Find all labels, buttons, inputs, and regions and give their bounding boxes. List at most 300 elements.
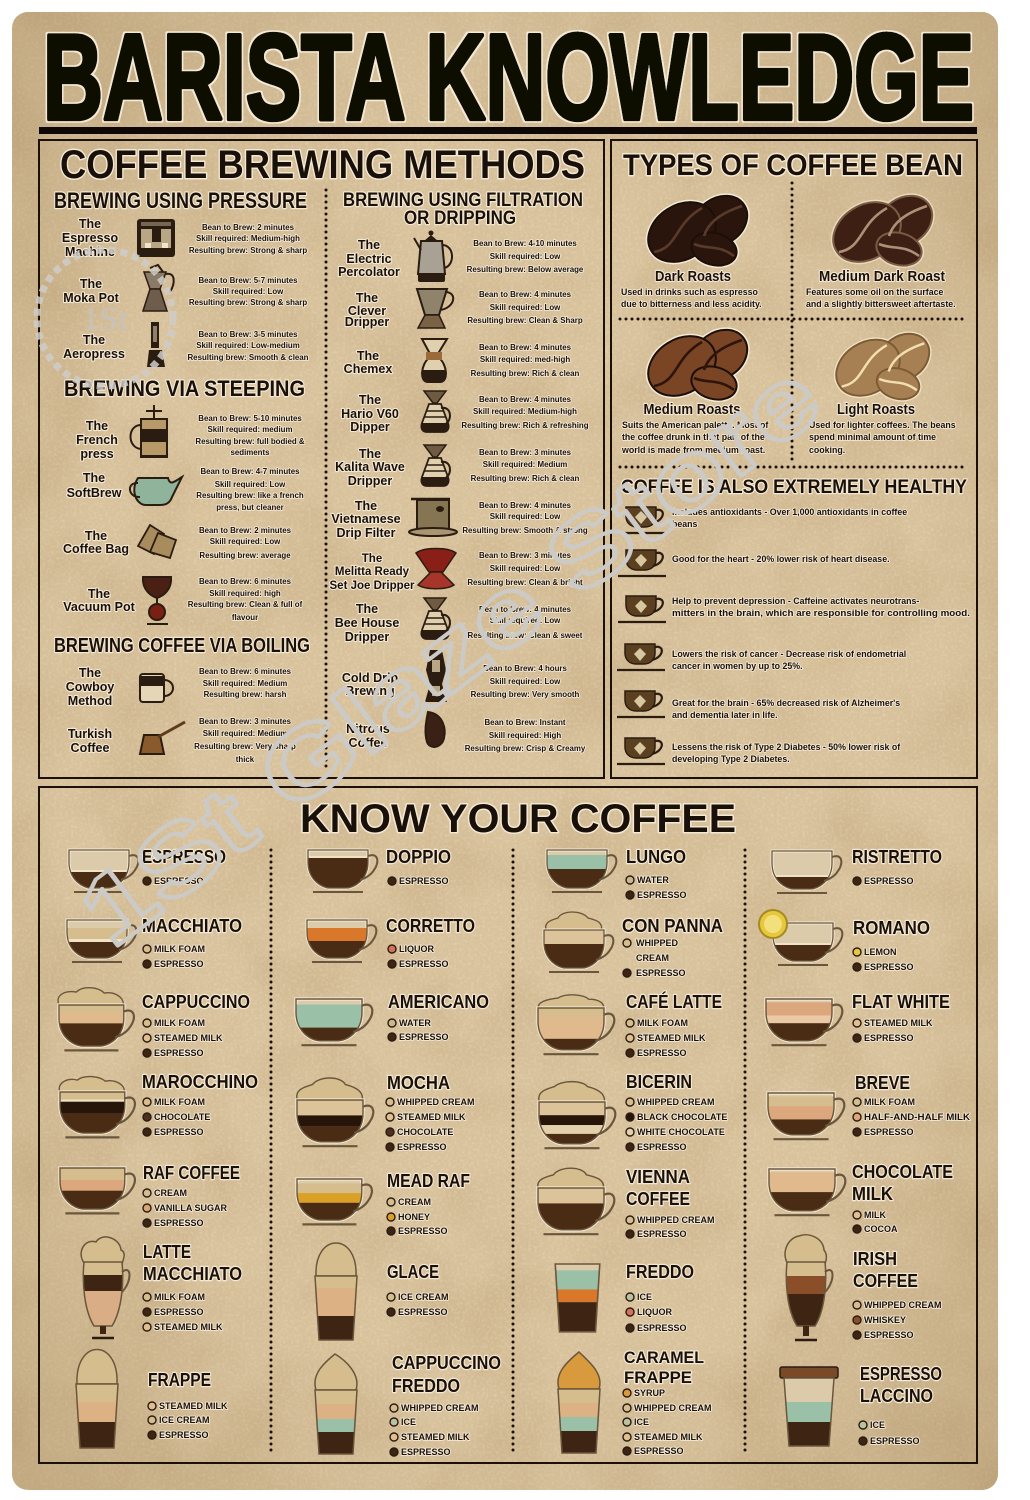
- icon: mead raf cup: [297, 1179, 372, 1224]
- drink: ristretto: [772, 846, 942, 893]
- icon: ristretto cup: [772, 851, 841, 893]
- legend: LEMON: [864, 947, 896, 957]
- method: hario v60 dripper: Hario V60: [341, 407, 399, 421]
- health: brain: Great for the brain - 65% decreased risk of Alzheimer's: [672, 698, 900, 708]
- method: espresso machine: Bean to Brew: 2 minutes: [202, 223, 295, 232]
- legend: STEAMED MILK: [634, 1432, 703, 1442]
- drink: americano: [296, 991, 489, 1045]
- legend: WHIPPED CREAM: [397, 1097, 475, 1107]
- drink: latte macchiato: [78, 1237, 242, 1338]
- icon: lungo cup: [547, 850, 616, 892]
- icon: irish coffee glass: [781, 1235, 832, 1340]
- legend: WATER: [637, 875, 669, 885]
- drink: bicerin: [539, 1071, 727, 1152]
- legend: LIQUOR: [637, 1307, 672, 1317]
- method: chemex: Skill required: med-high: [480, 355, 570, 364]
- icon: cappuccino freddo glass: [314, 1353, 358, 1455]
- method: moka pot: Skill required: Low: [213, 287, 284, 296]
- drink: mead raf: MEAD RAF: [387, 1170, 470, 1191]
- health: cancer: cancer in women by up to 25%.: [672, 661, 803, 671]
- legend: WHIPPED CREAM: [864, 1300, 942, 1310]
- drink: glace: GLACE: [387, 1261, 439, 1282]
- legend: ESPRESSO: [634, 1446, 684, 1456]
- health: depression: Help to prevent depression - Caffeine activates neurotrans-: [672, 596, 919, 606]
- method: electric percolator: Percolator: [338, 265, 400, 279]
- health: depression: mitters in the brain, which are responsible for controlling mood.: [672, 608, 970, 618]
- legend: MILK: [864, 1210, 886, 1220]
- legend: [387, 1197, 448, 1236]
- heading: brewing coffee via boiling: BREWING COFFEE VIA BOILING: [54, 635, 310, 657]
- method: coffee bag: Skill required: Low: [210, 537, 281, 546]
- drink: flat white: [766, 991, 950, 1045]
- bean: light roasts: Used for lighter coffees. The beans: [809, 420, 956, 430]
- heading: types of coffee bean: TYPES OF COFFEE BEAN: [623, 149, 963, 182]
- method: cold drip brewing: Skill required: Low: [490, 677, 561, 686]
- drink: cappuccino: [58, 988, 250, 1058]
- method: moka pot: The: [80, 277, 102, 291]
- drink: raf coffee: RAF COFFEE: [143, 1162, 240, 1183]
- legend: [387, 1292, 449, 1317]
- drink: marocchino: MAROCCHINO: [142, 1071, 258, 1092]
- method: cowboy method: Resulting brew: harsh: [204, 690, 287, 699]
- health: depression: [618, 596, 970, 622]
- legend: [853, 947, 914, 972]
- drink: raf coffee: [60, 1162, 240, 1228]
- drink: lungo: [547, 846, 687, 900]
- method: moka pot: Moka Pot: [63, 291, 120, 305]
- method: melitta ready set joe dripper: [330, 548, 583, 592]
- health: cancer: Lowers the risk of cancer - Decrease risk of endometrial: [672, 649, 906, 659]
- method: turkish coffee: [68, 717, 296, 764]
- legend: ESPRESSO: [398, 1226, 448, 1236]
- legend: ESPRESSO: [154, 876, 204, 886]
- drink: vienna coffee: COFFEE: [626, 1188, 690, 1209]
- method: bee house dripper: Resulting brew: Clean & sweet: [468, 631, 583, 640]
- legend: CHOCOLATE: [154, 1112, 210, 1122]
- legend: WHIPPED CREAM: [401, 1403, 479, 1413]
- method: electric percolator: Skill required: Low: [490, 252, 561, 261]
- legend: STEAMED MILK: [637, 1033, 706, 1043]
- method: chemex: Chemex: [344, 362, 392, 376]
- drink: mocha: [297, 1072, 475, 1152]
- heading: brewing via steeping: BREWING VIA STEEPING: [64, 376, 305, 401]
- legend: [143, 944, 205, 969]
- drink: breve: BREVE: [855, 1072, 910, 1093]
- icon: freddo glass: [551, 1264, 604, 1332]
- legend: ESPRESSO: [399, 959, 449, 969]
- icon: raf coffee cup: [60, 1168, 135, 1213]
- bean: medium dark roast: and a slightly bittersweet aftertaste.: [806, 299, 956, 309]
- method: electric percolator: Electric: [346, 252, 392, 266]
- legend: MILK FOAM: [154, 1097, 205, 1107]
- method: cowboy method: Method: [68, 694, 112, 708]
- method: espresso machine: The: [79, 217, 101, 231]
- drink: cafe latte: CAFÉ LATTE: [626, 991, 722, 1012]
- method: hario v60 dripper: Bean to Brew: 4 minutes: [479, 395, 572, 404]
- drink: marocchino: [59, 1071, 258, 1137]
- icon: breve cup: [768, 1093, 844, 1139]
- legend: VANILLA SUGAR: [154, 1203, 227, 1213]
- legend: SYRUP: [634, 1388, 665, 1398]
- drink: doppio: DOPPIO: [386, 846, 451, 867]
- legend: ESPRESSO: [159, 1430, 209, 1440]
- legend: ESPRESSO: [154, 1307, 204, 1317]
- heading: brewing using filtration or dripping: BREWING USING FILTRATION: [343, 190, 583, 211]
- icon: con panna cup: [544, 912, 613, 972]
- method: chemex: The: [357, 349, 379, 363]
- drink: cappuccino freddo: CAPPUCCINO: [392, 1352, 501, 1373]
- heading: brewing using filtration or dripping: OR DRIPPING: [404, 208, 516, 229]
- method: hario v60 dripper: Dipper: [350, 420, 390, 434]
- legend: [859, 1420, 920, 1446]
- icon: cafe latte cup: [538, 995, 614, 1054]
- drink: vienna coffee: [538, 1166, 715, 1239]
- legend: LIQUOR: [399, 944, 434, 954]
- icon: french press: [130, 405, 168, 458]
- legend: ICE: [401, 1417, 416, 1427]
- method: french press: Resulting brew: full bodied &: [195, 437, 305, 446]
- method: cowboy method: Bean to Brew: 6 minutes: [199, 667, 292, 676]
- legend: ESPRESSO: [864, 876, 914, 886]
- method: hario v60 dripper: Resulting brew: Rich & refreshing: [461, 421, 589, 430]
- method: softbrew: [67, 467, 304, 512]
- icon: coffee bags: [138, 525, 176, 558]
- drink: con panna: [544, 912, 723, 978]
- drink: corretto: [307, 915, 475, 969]
- legend: ESPRESSO: [154, 1127, 204, 1137]
- method: softbrew: Bean to Brew: 4-7 minutes: [200, 467, 300, 476]
- method: coffee bag: [63, 525, 292, 560]
- method: turkish coffee: Coffee: [71, 741, 109, 755]
- method: coffee bag: Bean to Brew: 2 minutes: [199, 526, 292, 535]
- panel: types of coffee bean: [611, 140, 977, 778]
- icon: caramel frappe glass: [554, 1352, 604, 1453]
- drink: bicerin: BICERIN: [626, 1071, 692, 1092]
- bean: dark roasts: [621, 186, 762, 309]
- legend: [143, 1188, 227, 1228]
- legend: [143, 1018, 223, 1058]
- legend: [623, 1388, 712, 1456]
- method: clever dripper: Dripper: [345, 315, 389, 329]
- icon: bee house dripper: [421, 598, 450, 639]
- icon: clever dripper: [417, 289, 453, 328]
- legend: ESPRESSO: [398, 1307, 448, 1317]
- method: vacuum pot: flavour: [232, 613, 258, 622]
- method: softbrew: Resulting brew: like a french: [196, 491, 304, 500]
- method: kalita wave dripper: Kalita Wave: [335, 460, 405, 474]
- legend: ESPRESSO: [637, 1229, 687, 1239]
- method: kalita wave dripper: Skill required: Medium: [483, 460, 567, 469]
- icon: cezve: [140, 722, 185, 754]
- legend: MILK FOAM: [154, 1018, 205, 1028]
- legend: MILK FOAM: [637, 1018, 688, 1028]
- method: espresso machine: Espresso: [62, 231, 119, 245]
- legend: MILK FOAM: [154, 944, 205, 954]
- icon: aeropress: [147, 322, 165, 367]
- heading: coffee brewing methods: COFFEE BREWING METHODS: [60, 143, 585, 187]
- method: moka pot: Bean to Brew: 5-7 minutes: [198, 276, 298, 285]
- legend: ESPRESSO: [636, 968, 686, 978]
- icon: mocha cup: [297, 1078, 373, 1146]
- method: aeropress: [63, 322, 309, 367]
- method: espresso machine: Skill required: Medium-high: [196, 234, 300, 243]
- legend: STEAMED MILK: [154, 1322, 223, 1332]
- health: heart: Good for the heart - 20% lower risk of heart disease.: [672, 554, 890, 564]
- icon: cup: [618, 596, 666, 622]
- legend: ESPRESSO: [637, 1142, 687, 1152]
- method: chemex: Bean to Brew: 4 minutes: [479, 343, 572, 352]
- legend: [626, 1292, 687, 1333]
- drink: mead raf: [297, 1170, 470, 1236]
- drink: caramel frappe: CARAMEL: [624, 1348, 704, 1367]
- method: cold drip brewing: [342, 650, 580, 702]
- drink: espresso: [69, 846, 226, 892]
- legend: ICE CREAM: [398, 1292, 449, 1302]
- method: cold drip brewing: Bean to Brew: 4 hours: [483, 664, 567, 673]
- legend: ESPRESSO: [637, 890, 687, 900]
- method: espresso machine: [62, 217, 307, 259]
- health: antioxidants: beans: [672, 519, 698, 529]
- drink: frappe: [72, 1350, 228, 1448]
- method: clever dripper: Resulting brew: Clean & Sharp: [467, 316, 583, 325]
- health: brain: [617, 691, 900, 720]
- drink: chocolate milk: CHOCOLATE: [852, 1161, 953, 1182]
- legend: ESPRESSO: [864, 1033, 914, 1043]
- legend: BLACK CHOCOLATE: [637, 1112, 727, 1122]
- legend: ESPRESSO: [637, 1323, 687, 1333]
- method: electric percolator: [338, 230, 584, 282]
- heading: coffee is also extremely healthy: COFFEE IS ALSO EXTREMELY HEALTHY: [621, 477, 967, 498]
- method: cowboy method: Cowboy: [66, 680, 114, 694]
- method: turkish coffee: Turkish: [68, 727, 112, 741]
- bean: medium roasts: Medium Roasts: [644, 402, 740, 418]
- method: vacuum pot: Vacuum Pot: [63, 600, 136, 614]
- drink: cappuccino freddo: [311, 1352, 501, 1457]
- bean: dark roasts: Used in drinks such as espresso: [621, 287, 759, 297]
- drink: espresso laccino: LACCINO: [860, 1385, 933, 1406]
- method: vietnamese drip filter: Bean to Brew: 4 minutes: [479, 501, 572, 510]
- method: nitrous coffee: Nitrous: [346, 722, 390, 736]
- icon: chemex: [422, 339, 447, 382]
- icon: americano cup: [296, 999, 372, 1045]
- drink: latte macchiato: MACCHIATO: [143, 1263, 242, 1284]
- method: vietnamese drip filter: [331, 499, 588, 540]
- method: electric percolator: The: [358, 238, 380, 252]
- drink: chocolate milk: MILK: [852, 1183, 894, 1204]
- legend: ICE: [634, 1417, 649, 1427]
- legend: WATER: [399, 1018, 431, 1028]
- drink: corretto: CORRETTO: [386, 915, 475, 936]
- legend: ESPRESSO: [399, 876, 449, 886]
- method: turkish coffee: thick: [236, 755, 255, 764]
- method: nitrous coffee: Bean to Brew: Instant: [484, 718, 566, 727]
- bean: dark roasts: Dark Roasts: [655, 269, 731, 285]
- drink: cafe latte: [538, 991, 722, 1058]
- icon: vienna coffee cup: [538, 1168, 614, 1234]
- method: chemex: [344, 339, 580, 382]
- icon: cowboy mug: [140, 674, 173, 702]
- bean: medium roasts: the coffee drunk in that part of the: [622, 432, 765, 442]
- method: clever dripper: Clever: [348, 304, 386, 318]
- drink: frappe: FRAPPE: [148, 1369, 211, 1390]
- drink: irish coffee: COFFEE: [853, 1270, 918, 1291]
- method: bee house dripper: Bee House: [335, 616, 399, 630]
- legend: [626, 1018, 706, 1058]
- drink: macchiato: MACCHIATO: [142, 915, 242, 936]
- legend: WHIPPED CREAM: [637, 1097, 715, 1107]
- method: espresso machine: Machine: [65, 245, 115, 259]
- icon: latte macchiato glass: [78, 1237, 130, 1338]
- legend: [853, 1018, 933, 1043]
- method: softbrew: The: [83, 471, 105, 485]
- health: diabetes: [617, 738, 900, 764]
- legend: WHIPPED: [636, 938, 679, 948]
- method: french press: [76, 405, 305, 461]
- panel: know your coffee: [39, 787, 977, 1463]
- method: electric percolator: Bean to Brew: 4-10 minutes: [473, 239, 577, 248]
- method: clever dripper: [345, 289, 583, 329]
- icon: cup: [618, 550, 666, 576]
- icon: kalita wave: [421, 445, 450, 486]
- method: electric percolator: Resulting brew: Below average: [467, 265, 584, 274]
- method: bee house dripper: Skill required: Low: [490, 616, 561, 625]
- bean: dark roasts: due to bitterness and less acidity.: [621, 299, 762, 309]
- drink: con panna: CON PANNA: [622, 915, 723, 936]
- method: bee house dripper: Dripper: [345, 630, 389, 644]
- method: aeropress: The: [83, 333, 105, 347]
- icon: marocchino cup: [59, 1077, 135, 1137]
- method: nitrous coffee: Coffee: [349, 736, 387, 750]
- bean: light roasts: spend minimal amount of time: [809, 432, 936, 442]
- icon: romano cup with lemon: [759, 910, 842, 965]
- method: melitta ready set joe dripper: Resulting brew: Clean & bright: [467, 578, 583, 587]
- bean: medium dark roast: Medium Dark Roast: [819, 269, 945, 285]
- watermark: diagonal store name: 1St Glaze Store: [60, 343, 839, 967]
- method: french press: sediments: [230, 448, 270, 457]
- icon: cup: [618, 507, 666, 533]
- legend: MILK FOAM: [864, 1097, 915, 1107]
- method: clever dripper: The: [356, 291, 378, 305]
- drink: glace: [311, 1243, 449, 1340]
- method: cold drip brewing: Resulting brew: Very smooth: [471, 690, 580, 699]
- legend: ICE: [870, 1420, 885, 1430]
- method: cold drip brewing: Cold Drip: [342, 671, 398, 685]
- drink: cappuccino freddo: FREDDO: [392, 1375, 460, 1396]
- method: hario v60 dripper: The: [359, 393, 381, 407]
- icon: vietnamese drip filter: [409, 499, 457, 536]
- legend: MILK FOAM: [154, 1292, 205, 1302]
- method: melitta ready set joe dripper: The: [362, 553, 382, 565]
- method: turkish coffee: Skill required: Medium: [203, 729, 287, 738]
- legend: ESPRESSO: [399, 1032, 449, 1042]
- method: bee house dripper: [335, 598, 583, 644]
- icon: medium dark roast beans: [822, 186, 942, 274]
- method: kalita wave dripper: Resulting brew: Rich & clean: [471, 474, 580, 483]
- method: nitrous coffee: Resulting brew: Crisp & Creamy: [465, 744, 586, 753]
- method: aeropress: Skill required: Low-medium: [196, 341, 300, 350]
- health: antioxidants: Includes antioxidants - Over 1,000 antioxidants in coffee: [672, 507, 907, 517]
- icon: doppio cup: [308, 850, 377, 892]
- icon: glace glass: [314, 1242, 358, 1341]
- method: kalita wave dripper: [335, 445, 580, 488]
- bean: medium roasts: [621, 320, 768, 455]
- drink: mocha: MOCHA: [387, 1072, 450, 1093]
- legend: ESPRESSO: [154, 959, 204, 969]
- legend: STEAMED MILK: [864, 1018, 933, 1028]
- drink: vienna coffee: VIENNA: [626, 1166, 690, 1187]
- method: french press: The: [86, 419, 108, 433]
- method: moka pot: [63, 265, 307, 311]
- legend: ESPRESSO: [397, 1142, 447, 1152]
- icon: melitta dripper: [416, 548, 456, 589]
- drink: macchiato: [67, 915, 242, 969]
- legend: [390, 1403, 479, 1457]
- drink: irish coffee: [781, 1235, 942, 1340]
- legend: ESPRESSO: [870, 1436, 920, 1446]
- icon: hario v60: [421, 391, 450, 432]
- icon: espresso machine: [137, 219, 175, 257]
- method: coffee bag: The: [85, 529, 107, 543]
- method: vacuum pot: Skill required: high: [209, 589, 281, 598]
- legend: ESPRESSO: [154, 1048, 204, 1058]
- drink: ristretto: RISTRETTO: [852, 846, 942, 867]
- drink: americano: AMERICANO: [388, 991, 489, 1012]
- method: kalita wave dripper: Bean to Brew: 3 minutes: [479, 448, 572, 457]
- legend: [626, 1097, 727, 1152]
- bean: light roasts: cooking.: [809, 445, 845, 455]
- method: bee house dripper: The: [356, 602, 378, 616]
- icon: cup: [617, 691, 665, 717]
- icon: frappe glass: [75, 1348, 119, 1449]
- drink: caramel frappe: [554, 1348, 712, 1456]
- method: softbrew: SoftBrew: [67, 486, 122, 500]
- legend: ESPRESSO: [154, 1218, 204, 1228]
- icon: vacuum pot: [143, 577, 171, 624]
- icon: dark roast beans: [637, 186, 757, 274]
- drink: espresso: ESPRESSO: [142, 846, 226, 867]
- method: vietnamese drip filter: Vietnamese: [331, 512, 401, 526]
- method: softbrew: Skill required: Low: [215, 480, 286, 489]
- drink: irish coffee: IRISH: [853, 1248, 897, 1269]
- drink: lungo: LUNGO: [626, 846, 686, 867]
- method: vacuum pot: Resulting brew: Clean & full of: [188, 600, 303, 609]
- health: cancer: [617, 644, 906, 671]
- icon: cappuccino cup: [58, 988, 134, 1050]
- method: kalita wave dripper: The: [359, 447, 381, 461]
- method: melitta ready set joe dripper: Skill required: Low: [490, 564, 561, 573]
- bean: medium dark roast: [806, 186, 956, 309]
- icon: cup: [617, 738, 665, 764]
- method: vacuum pot: The: [88, 587, 110, 601]
- drink: romano: ROMANO: [853, 917, 930, 938]
- drink: breve: [768, 1072, 971, 1139]
- method: vacuum pot: [63, 577, 303, 624]
- heading: know your coffee: KNOW YOUR COFFEE: [300, 797, 736, 841]
- bean: light roasts: [809, 324, 956, 455]
- legend: [853, 1300, 942, 1340]
- icon: macchiato cup: [67, 920, 136, 962]
- health: antioxidants: [618, 507, 907, 533]
- legend: [626, 875, 687, 900]
- method: turkish coffee: Bean to Brew: 3 minutes: [199, 717, 292, 726]
- legend: CHOCOLATE: [397, 1127, 453, 1137]
- legend: CREAM: [154, 1188, 187, 1198]
- bean: light roasts: Light Roasts: [837, 402, 915, 418]
- drink: caramel frappe: FRAPPE: [624, 1368, 692, 1387]
- legend: STEAMED MILK: [397, 1112, 466, 1122]
- legend: [388, 1018, 449, 1042]
- bean: medium roasts: Suits the American palette. Most of: [622, 420, 768, 430]
